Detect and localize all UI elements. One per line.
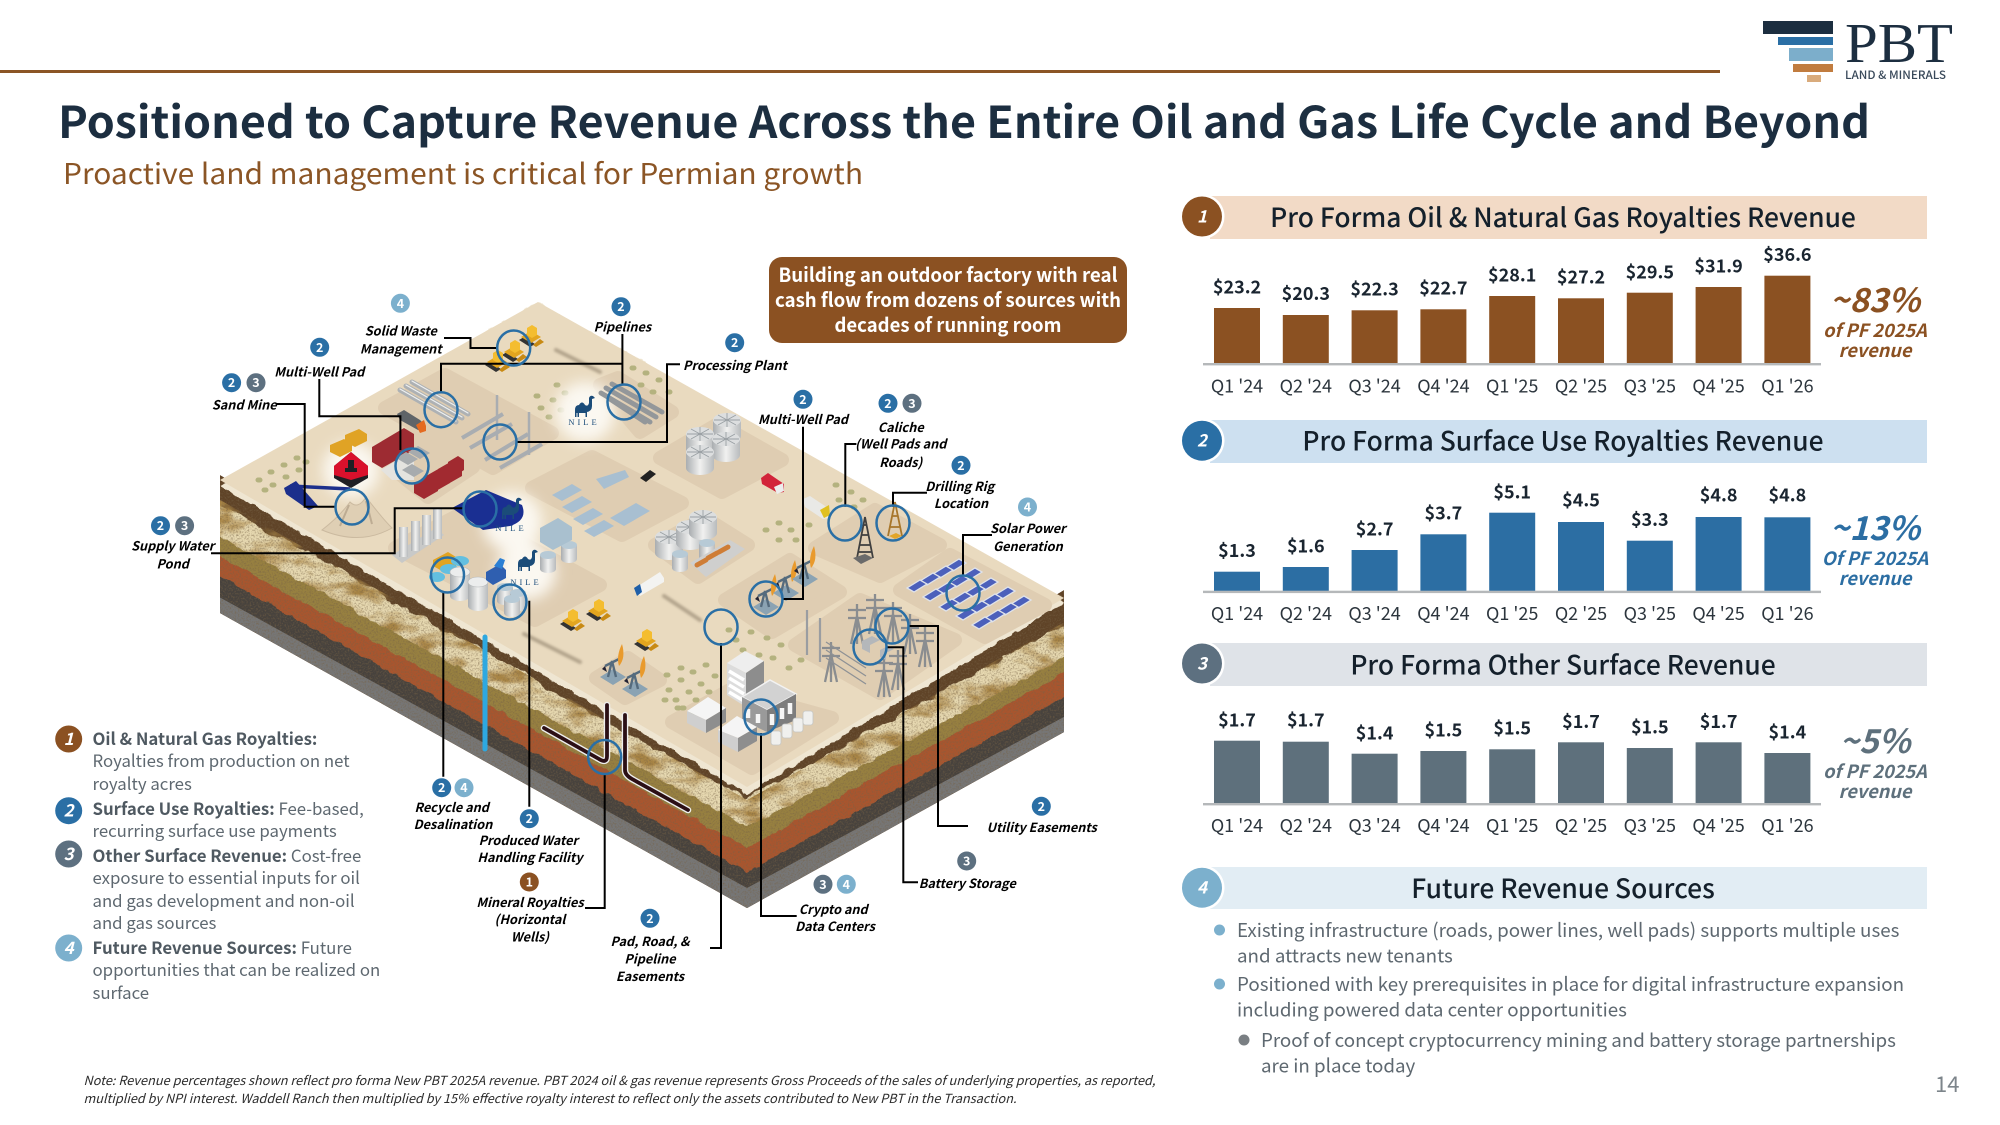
bar chart 3: Q1 '24 xyxy=(1211,812,1263,838)
pumpjacks xyxy=(600,546,818,697)
label: drilling rig location: Location xyxy=(934,493,989,512)
isometric land diagram xyxy=(210,302,1075,948)
label: multi-well pad right xyxy=(758,389,850,428)
section header 1: Pro Forma Oil & Natural Gas Royalties Revenue xyxy=(1270,196,1856,235)
bar chart 2: Q3 '25 xyxy=(1624,600,1676,626)
share callout 5% xyxy=(1823,715,1927,804)
footnote: multiplied by NPI interest. Waddell Ranch then multiplied by 15% effective royalty interest to reflect only the assets contributed to New PBT in the Transaction. xyxy=(84,1088,1016,1107)
label: crypto and data centers xyxy=(795,874,877,935)
legend: revenue categories: and gas development and non-oil xyxy=(92,888,355,912)
processing plant flare stacks xyxy=(462,395,542,468)
bar chart 3: Q4 '25 xyxy=(1692,812,1745,838)
legend: revenue categories: Royalties from production on net xyxy=(92,748,350,772)
bar chart 1: Q3 '25 xyxy=(1624,373,1676,399)
label: caliche: (Well Pads and xyxy=(855,434,948,452)
bar chart 1: $20.3 xyxy=(1282,280,1330,306)
bar chart 1: Q1 '26 xyxy=(1761,373,1814,399)
label: solar power generation: Generation xyxy=(993,536,1064,555)
sand mine: trucks, conveyor, hex sign, containers, pile xyxy=(284,428,464,538)
legend: revenue categories: 2 xyxy=(64,797,76,822)
header rule xyxy=(0,70,1720,73)
callout: outdoor factory: cash flow from dozens of sources with xyxy=(775,284,1121,313)
footnote: Note: Revenue percentages shown reflect pro forma New PBT 2025A revenue. PBT 2024 oil & gas revenue represents Gross Proceeds of the sales of underlying properties, as reported, xyxy=(84,1070,1156,1089)
bar chart 2: Q1 '26 xyxy=(1761,600,1814,626)
bar chart 2: $3.3 xyxy=(1631,506,1669,532)
label: utility easements xyxy=(987,796,1099,836)
share callout 83%: revenue xyxy=(1839,337,1913,363)
machines xyxy=(485,325,659,651)
callout: outdoor factory: decades of running room xyxy=(834,309,1062,338)
bar chart 2: $3.7 xyxy=(1425,499,1462,525)
horizontal wells xyxy=(544,705,688,810)
label: battery storage xyxy=(919,850,1018,892)
label: sand mine: 2 xyxy=(228,372,235,391)
bar chart 1: $36.6 xyxy=(1763,241,1812,267)
label: crypto and data centers: Data Centers xyxy=(795,916,877,935)
label: caliche: Roads) xyxy=(879,452,924,471)
bar chart 1: $28.1 xyxy=(1488,262,1536,288)
bar chart 2: $2.7 xyxy=(1356,516,1393,542)
section header 1 xyxy=(1180,194,1927,239)
bar chart 3: $1.7 xyxy=(1287,707,1325,733)
bar chart 3: Q1 '26 xyxy=(1761,812,1814,838)
legend: revenue categories: 1 xyxy=(64,725,74,750)
label: pad road pipeline easements: Easements xyxy=(616,966,686,985)
section header 3 xyxy=(1180,641,1927,686)
label: utility easements: Utility Easements xyxy=(987,817,1099,836)
label: utility easements: 2 xyxy=(1038,796,1045,815)
label: recycle and desalination: 2 xyxy=(438,777,445,796)
bar chart 3: Q3 '24 xyxy=(1348,812,1401,838)
location markers xyxy=(336,330,980,774)
bullet list xyxy=(1214,916,1904,1079)
label: processing plant: 2 xyxy=(731,332,738,351)
label: solid waste management: Management xyxy=(360,338,443,358)
bar chart 2: Q1 '24 xyxy=(1211,600,1263,626)
legend: revenue categories: Other Surface Revenue: Cost-free xyxy=(92,843,361,867)
share callout 13% xyxy=(1822,502,1929,591)
label: mineral royalties: Mineral Royalties xyxy=(476,892,585,911)
bar chart 2: Q2 '25 xyxy=(1555,600,1607,626)
legend: revenue categories: Surface Use Royalties: Fee-based, xyxy=(92,796,364,820)
section header 4: Future Revenue Sources xyxy=(1411,867,1715,906)
label: multi-well pad left: 2 xyxy=(316,337,323,356)
legend: revenue categories xyxy=(55,725,380,1004)
bar chart 3: $1.7 xyxy=(1700,708,1737,734)
label: recycle and desalination: 4 xyxy=(460,777,468,796)
section header 4: 4 xyxy=(1197,874,1209,899)
label: supply water pond: 2 xyxy=(157,515,164,534)
legend: revenue categories: 4 xyxy=(64,934,76,959)
bar chart 1: $31.9 xyxy=(1694,252,1743,278)
bar chart 1: Q3 '24 xyxy=(1348,373,1401,399)
label: pad road pipeline easements xyxy=(611,908,691,985)
solar panels xyxy=(907,559,1031,629)
label: supply water pond: 3 xyxy=(181,515,188,534)
pipe racks xyxy=(400,381,662,422)
bar chart 3: Q3 '25 xyxy=(1624,812,1676,838)
NILE logos xyxy=(495,396,600,587)
label: battery storage: Battery Storage xyxy=(919,873,1018,892)
bar chart 2: $4.8 xyxy=(1700,482,1737,508)
share callout 13%: revenue xyxy=(1839,565,1913,591)
label: pad road pipeline easements: Pipeline xyxy=(624,948,677,968)
label: drilling rig location xyxy=(925,455,997,512)
bar chart 3: $1.5 xyxy=(1493,715,1531,741)
legend: revenue categories: recurring surface use payments xyxy=(92,818,337,842)
section header 2 xyxy=(1180,418,1927,463)
label: recycle and desalination: Desalination xyxy=(414,814,493,833)
bar chart 1: $22.7 xyxy=(1419,275,1468,301)
panel: other surface revenue xyxy=(1180,641,1927,838)
subsurface water pipe xyxy=(482,637,488,749)
label: processing plant: Processing Plant xyxy=(683,355,789,374)
bar chart 3: Q2 '24 xyxy=(1280,812,1332,838)
development pads xyxy=(378,375,1045,768)
supply water pond xyxy=(452,490,524,530)
legend: revenue categories: 3 xyxy=(64,840,76,865)
share callout 13%: Of PF 2025A xyxy=(1822,545,1929,571)
label: crypto and data centers: 4 xyxy=(843,874,851,893)
label: caliche: 3 xyxy=(908,393,916,412)
legend: revenue categories: surface xyxy=(92,980,149,1004)
label: sand mine: Sand Mine xyxy=(212,394,278,414)
data center buildings xyxy=(687,651,813,752)
legend: revenue categories: and gas sources xyxy=(92,910,217,934)
silos xyxy=(392,509,444,563)
section header 3: Pro Forma Other Surface Revenue xyxy=(1350,644,1776,682)
label: solid waste management: Solid Waste xyxy=(365,320,438,340)
bar chart 1: Q4 '24 xyxy=(1417,373,1470,399)
subtitle: Proactive land management is critical for Permian growth xyxy=(63,152,863,193)
bar chart 3: $1.7 xyxy=(1218,707,1256,733)
bar chart 1: Q4 '25 xyxy=(1692,373,1745,399)
label: solid waste management xyxy=(360,293,443,358)
road scars xyxy=(524,350,700,662)
label: solar power generation: 4 xyxy=(1024,496,1032,516)
label: produced water handling facility: Handling Facility xyxy=(477,847,584,866)
label: mineral royalties: (Horizontal xyxy=(495,909,567,928)
bar chart 2: $5.1 xyxy=(1493,478,1531,504)
label: multi-well pad right: 2 xyxy=(799,389,807,408)
bar chart 3: $1.7 xyxy=(1562,708,1600,734)
label: drilling rig location: 2 xyxy=(957,455,965,474)
panel: surface use royalties xyxy=(1180,418,1929,626)
bullet list: and attracts new tenants xyxy=(1237,942,1453,968)
label: multi-well pad right: Multi-Well Pad xyxy=(758,409,850,428)
section header 2: 2 xyxy=(1197,427,1209,452)
NILE logo glows xyxy=(323,382,615,600)
bullet list: Existing infrastructure (roads, power lines, well pads) supports multiple uses xyxy=(1237,916,1900,943)
bar chart 3: $1.4 xyxy=(1356,719,1394,745)
label: sand mine: 3 xyxy=(252,372,260,391)
NILE logos: NILE xyxy=(568,417,600,427)
share callout 5%: revenue xyxy=(1839,778,1913,804)
bar chart 2: $1.3 xyxy=(1218,537,1256,563)
legend: revenue categories: exposure to essential inputs for oil xyxy=(92,865,360,889)
bullet list: Proof of concept cryptocurrency mining and battery storage partnerships xyxy=(1261,1026,1896,1053)
bar chart 1: $23.2 xyxy=(1213,273,1261,299)
bar chart 3: $1.5 xyxy=(1425,717,1462,743)
callout: outdoor factory xyxy=(769,257,1127,343)
label: recycle and desalination xyxy=(414,777,493,833)
panel: future revenue sources xyxy=(1180,865,1927,1079)
bar chart 2 xyxy=(1203,478,1821,626)
share callout 83%: of PF 2025A xyxy=(1823,317,1927,343)
label: crypto and data centers: Crypto and xyxy=(799,899,870,918)
shrubs xyxy=(258,368,864,715)
substation and utility poles xyxy=(807,594,934,697)
bullet list: Positioned with key prerequisites in place for digital infrastructure expansion xyxy=(1237,970,1904,997)
bar chart 1: Q1 '24 xyxy=(1211,373,1263,399)
share callout 83% xyxy=(1823,274,1927,363)
bar chart 2: $1.6 xyxy=(1287,533,1325,559)
section header 4 xyxy=(1180,865,1927,910)
drilling rigs xyxy=(853,502,902,564)
bar chart 3 xyxy=(1203,707,1821,838)
section header 2: Pro Forma Surface Use Royalties Revenue xyxy=(1302,420,1824,458)
label: solid waste management: 4 xyxy=(397,293,405,312)
bar chart 2: Q4 '25 xyxy=(1692,600,1745,626)
share callout 13%: ~13% xyxy=(1830,502,1922,550)
share callout 5%: of PF 2025A xyxy=(1823,758,1927,784)
label: solar power generation xyxy=(990,496,1068,555)
bullet list: including powered data center opportunities xyxy=(1237,996,1627,1022)
legend: revenue categories: Future Revenue Sources: Future xyxy=(92,935,352,959)
bar chart 3: Q4 '24 xyxy=(1417,812,1470,838)
legend: revenue categories: royalty acres xyxy=(92,771,192,795)
label: pipelines: 2 xyxy=(617,296,625,315)
label: sand mine xyxy=(212,372,278,414)
label: produced water handling facility: Produced Water xyxy=(479,830,580,849)
label: processing plant xyxy=(683,332,789,374)
logo: PBT Land & Minerals: PBT xyxy=(1845,13,1953,75)
page number: 14 xyxy=(1935,1067,1959,1099)
bar chart 2: Q1 '25 xyxy=(1486,600,1538,626)
panel: oil and natural gas royalties xyxy=(1180,194,1927,399)
bar chart 2: Q4 '24 xyxy=(1417,600,1470,626)
bar chart 3: $1.5 xyxy=(1631,713,1669,739)
bar chart 1 xyxy=(1203,241,1821,399)
leader lines xyxy=(211,334,992,948)
label: mineral royalties xyxy=(476,872,585,946)
bar chart 3: Q1 '25 xyxy=(1486,812,1538,838)
label: recycle and desalination: Recycle and xyxy=(414,797,491,816)
bar chart 3: $1.4 xyxy=(1769,718,1807,744)
bar chart 1: $27.2 xyxy=(1557,263,1605,289)
bar chart 1: Q1 '25 xyxy=(1486,373,1538,399)
logo: PBT Land & Minerals xyxy=(1763,13,1953,83)
legend: revenue categories: opportunities that can be realized on xyxy=(92,957,380,981)
label: mineral royalties: 1 xyxy=(526,872,533,890)
share callout 83%: ~83% xyxy=(1830,274,1922,322)
label: supply water pond: Pond xyxy=(156,554,191,572)
label: pad road pipeline easements: Pad, Road, & xyxy=(611,931,691,950)
footnote xyxy=(84,1070,1156,1107)
bar chart 1: $29.5 xyxy=(1626,258,1674,284)
storage tanks xyxy=(655,413,745,577)
label: pipelines xyxy=(594,296,653,336)
bar chart 2: Q2 '24 xyxy=(1280,600,1332,626)
label: caliche: 2 xyxy=(884,393,892,412)
label: multi-well pad left: Multi-Well Pad xyxy=(274,362,366,380)
section header 3: 3 xyxy=(1197,650,1209,674)
ground surface xyxy=(220,302,1064,794)
bar chart 1: $22.3 xyxy=(1350,275,1399,301)
strata block xyxy=(210,470,1075,930)
label: caliche xyxy=(855,393,948,471)
label: produced water handling facility: 2 xyxy=(526,808,533,827)
callout: outdoor factory: Building an outdoor factory with real xyxy=(778,259,1118,288)
central blue equipment xyxy=(552,470,656,537)
bar chart 1: Q2 '24 xyxy=(1280,373,1332,399)
label: battery storage: 3 xyxy=(963,850,970,870)
bar chart 1: Q2 '25 xyxy=(1555,373,1607,399)
label: supply water pond xyxy=(131,515,217,572)
legend: revenue categories: Oil & Natural Gas Royalties: xyxy=(92,726,317,750)
label: multi-well pad left xyxy=(274,337,366,380)
label: produced water handling facility xyxy=(477,808,584,866)
label: crypto and data centers: 3 xyxy=(819,874,827,893)
trucks xyxy=(397,410,830,596)
share callout 5%: ~5% xyxy=(1840,715,1913,763)
label: supply water pond: Supply Water xyxy=(131,536,217,554)
label: pad road pipeline easements: 2 xyxy=(646,908,654,927)
label: solar power generation: Solar Power xyxy=(990,518,1068,537)
NILE logos: NILE xyxy=(495,523,527,533)
bar chart 3: Q2 '25 xyxy=(1555,812,1607,838)
title: Positioned to Capture Revenue Across the Entire Oil and Gas Life Cycle and Beyond xyxy=(58,87,1870,151)
water treatment: pools and tanks xyxy=(429,518,577,617)
bar chart 2: $4.8 xyxy=(1769,482,1806,508)
label: mineral royalties: Wells) xyxy=(511,926,550,946)
NILE logos: NILE xyxy=(510,577,542,587)
logo: PBT Land & Minerals: LAND & MINERALS xyxy=(1845,67,1946,83)
section header 1: 1 xyxy=(1197,202,1207,228)
bullet list: are in place today xyxy=(1261,1052,1416,1079)
label: pipelines: Pipelines xyxy=(594,316,653,336)
label: caliche: Caliche xyxy=(878,417,925,436)
bar chart 2: Q3 '24 xyxy=(1348,600,1401,626)
bar chart 2: $4.5 xyxy=(1562,487,1600,513)
label: drilling rig location: Drilling Rig xyxy=(925,476,997,495)
